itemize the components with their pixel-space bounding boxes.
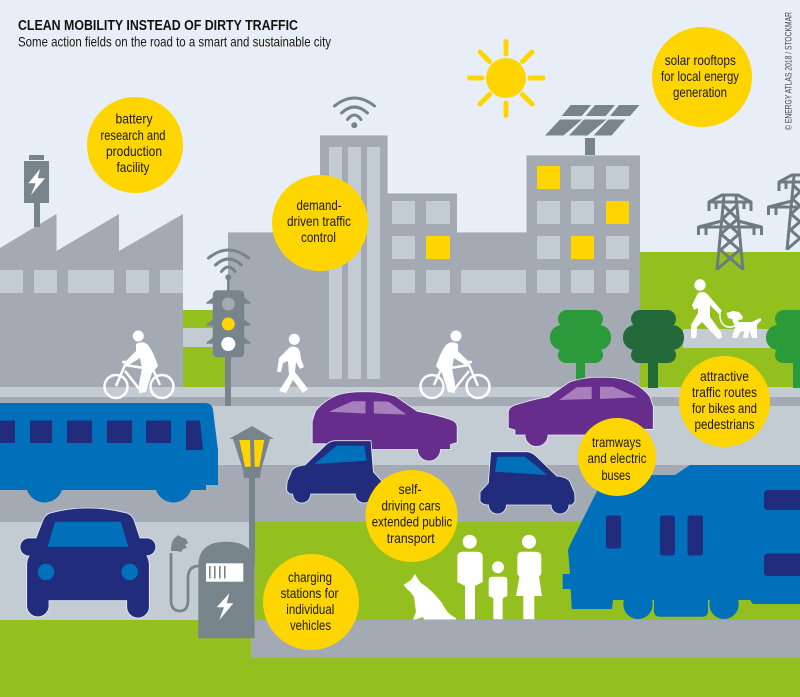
tree right edge [766,310,800,388]
callout: self-driving cars: extended public [372,515,452,530]
pedestrian with dog [691,279,762,339]
callout: solar rooftops: generation [673,85,727,100]
small electric car right [480,452,575,514]
callout: solar rooftops [652,27,752,127]
callout: battery: facility [116,160,150,175]
icon: pylon 2 [768,175,800,250]
pedestrian on sidewalk [277,334,308,393]
callout: demand-driven traffic control: demand- [296,198,342,213]
callout: tramways and electric buses: buses [602,468,631,483]
tree dark green [623,310,684,388]
callout: self-driving cars: transport [387,531,435,546]
callout: battery: battery [116,112,153,126]
navy car front view [20,508,156,618]
subtitle: Some action fields on the road to a smart and sustainable city [18,34,331,50]
tram [563,465,800,619]
callout: attractive traffic routes: attractive [700,369,749,384]
callout: tramways and electric buses: tramways [592,435,641,450]
title: CLEAN MOBILITY INSTEAD OF DIRTY TRAFFIC [18,18,298,34]
factory building [0,214,183,388]
street lamp [229,426,274,565]
footpath on the right meadow [683,329,800,348]
callout: attractive traffic routes [679,356,770,447]
callout: attractive traffic routes: pedestrians [694,417,755,432]
icon: wifi on traffic light [208,250,248,280]
callout: charging stations: individual [286,602,334,617]
small electric car left [287,441,382,503]
callout: attractive traffic routes: for bikes and [692,401,757,416]
icon: wifi on tower [334,98,374,128]
callout: demand-driven traffic control: driven traffic [287,214,351,229]
tree light green [550,310,611,388]
icon: battery on factory [24,155,49,227]
cyclist centre [420,330,490,398]
callout: solar rooftops: solar rooftops [665,53,736,68]
callout: demand-driven traffic control [272,175,368,271]
green lawn foreground [0,522,800,697]
green area behind the city [183,252,800,388]
street foreground [251,620,800,658]
callout: tramways and electric buses: and electric [588,451,647,466]
callout: charging stations [263,554,359,650]
callout: charging stations: charging [288,570,332,585]
callout: battery [87,97,183,193]
icon: sun [470,42,543,116]
purple car rear left [312,392,457,461]
city buildings [228,135,640,388]
callout: self-driving cars: driving cars [382,499,441,514]
callout: solar rooftops: for local energy [661,69,739,84]
road surfaces [0,387,800,620]
callout: battery: production [106,144,162,159]
traffic light [207,279,250,406]
icon: solar panel on roof [545,105,640,155]
blue bus [0,403,218,502]
family with dog [404,535,542,620]
callout: battery: research and [100,128,166,143]
icon: pylon 1 [698,195,762,270]
callout: demand-driven traffic control: control [301,230,336,245]
callout: self-driving cars [366,470,458,562]
charging station [171,535,255,638]
purple car right [508,377,653,446]
cyclist left [104,330,174,398]
callout: attractive traffic routes: traffic routes [692,385,757,400]
callout: charging stations: stations for [280,586,339,601]
callout: charging stations: vehicles [290,618,331,633]
callout: self-driving cars: self- [398,482,422,497]
callout: tramways and electric buses [578,418,656,496]
